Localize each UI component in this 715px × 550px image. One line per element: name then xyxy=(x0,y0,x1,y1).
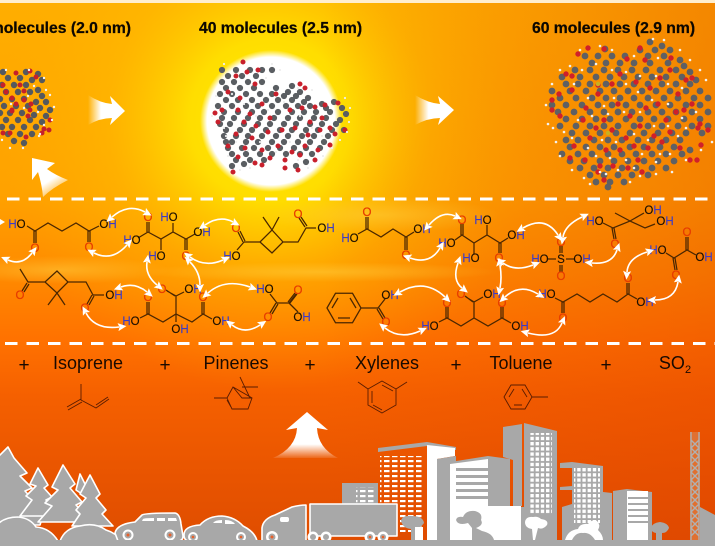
arrow: up, emissions rising xyxy=(273,412,338,458)
molecules: citric acid left: OH xyxy=(184,284,202,296)
molecules: oxalic acid right xyxy=(649,227,713,282)
arrow: right, cluster 40 to 60 xyxy=(415,95,454,125)
molecules: citric acid left: O xyxy=(199,292,208,304)
low striped building xyxy=(613,489,652,541)
precursor labels row xyxy=(18,353,691,376)
molecules: succinic acid: O xyxy=(402,250,411,262)
molecules: oxalic acid right: O xyxy=(683,227,692,239)
molecules: pinic acid: O xyxy=(232,223,241,235)
molecular cluster: 40 molecules xyxy=(212,62,350,172)
car: beetle xyxy=(184,516,257,542)
heading: 40 molecules: 40 molecules (2.5 nm) xyxy=(199,20,362,37)
tall tower xyxy=(503,423,557,541)
molecules: glutaric acid: O xyxy=(85,242,94,254)
molecules: adipic acid: O xyxy=(624,273,633,285)
molecules: citric-like acid right: O xyxy=(457,289,466,301)
molecules: citric acid left: HO xyxy=(122,316,140,328)
molecules: pinonic acid: O xyxy=(16,290,25,302)
precursor labels row: 2 xyxy=(685,364,691,376)
molecules: sulfuric acid: HO xyxy=(531,254,549,266)
structure: pinene xyxy=(214,377,258,409)
precursor labels row: + xyxy=(600,355,612,376)
molecules: glutaric acid xyxy=(8,219,117,255)
mid tower xyxy=(560,462,612,541)
molecules: pinic acid xyxy=(223,209,335,263)
molecules: sulfuric acid: O xyxy=(557,271,566,283)
precursor labels row: Isoprene xyxy=(53,353,123,373)
molecules: tartaric acid left: HO xyxy=(160,212,178,224)
molecules: methyl hydroxy acid: HO xyxy=(586,216,604,228)
molecules: oxalic acid left: O xyxy=(264,312,273,324)
molecules: oxalic acid left: O xyxy=(294,285,303,297)
molecular cluster: 60 molecules xyxy=(546,39,712,187)
molecular cluster: 20 molecules xyxy=(0,70,54,148)
molecules: tartaric acid left: OH xyxy=(193,227,211,239)
dashed divider xyxy=(5,342,715,345)
molecules: citric-like acid right: HO xyxy=(421,321,439,333)
molecules: oxalic acid left: OH xyxy=(293,312,311,324)
molecules: citric acid left: OH xyxy=(171,324,189,336)
cityscape xyxy=(0,423,715,546)
structure: toluene xyxy=(504,385,548,409)
molecules: methyl hydroxy acid: OH xyxy=(656,216,674,228)
molecules: benzoic acid: OH xyxy=(381,290,399,302)
molecules: tartaric acid left: O xyxy=(144,212,153,224)
molecules: benzoic acid: O xyxy=(382,317,391,329)
molecules: methyl hydroxy acid xyxy=(586,205,674,251)
heading: 60 molecules: 60 molecules (2.9 nm) xyxy=(532,20,695,37)
structure: isoprene xyxy=(67,384,109,410)
molecules: oxalic acid right: OH xyxy=(695,252,713,264)
molecules: pinonic acid xyxy=(16,269,123,315)
trees: city xyxy=(401,511,669,540)
molecules: pinic acid: OH xyxy=(317,223,335,235)
molecules: citric-like acid right: O xyxy=(443,298,452,310)
molecules: glutaric acid: O xyxy=(31,243,40,255)
structure: xylene xyxy=(358,381,407,413)
molecules: glutaric acid: HO xyxy=(8,219,26,231)
molecules: pinonic acid: OH xyxy=(105,290,123,302)
precursor labels row: Pinenes xyxy=(203,353,269,373)
precursor labels row: Xylenes xyxy=(355,353,419,373)
molecules: tartaric acid left: HO xyxy=(148,251,166,263)
molecules: tartaric acid right xyxy=(438,215,525,265)
molecules: citric-like acid right: OH xyxy=(483,289,501,301)
dashed divider xyxy=(7,198,715,200)
precursor labels row: + xyxy=(18,355,30,376)
bottom margin xyxy=(0,546,715,550)
molecules: tartaric acid left xyxy=(123,212,211,263)
molecules: citric acid left: OH xyxy=(212,316,230,328)
molecules: pinonic acid: O xyxy=(81,303,90,315)
molecules: pinic acid: O xyxy=(294,209,303,221)
molecules: benzoic acid xyxy=(327,290,399,329)
molecules: tartaric acid right: HO xyxy=(438,238,456,250)
molecules: citric acid left: O xyxy=(144,292,153,304)
molecules: pinic acid: HO xyxy=(223,251,241,263)
hydrogen-bond arrows xyxy=(0,208,678,335)
molecules: succinic acid: HO xyxy=(341,233,359,245)
molecules: methyl hydroxy acid: OH xyxy=(644,205,662,217)
molecules: sulfuric acid: O xyxy=(557,237,566,249)
molecules: tartaric acid right: O xyxy=(458,215,467,227)
molecules: sulfuric acid xyxy=(531,237,591,283)
molecules: adipic acid: OH xyxy=(636,297,654,309)
sun xyxy=(200,50,342,192)
trees: forest xyxy=(0,447,122,541)
building with orange facade xyxy=(378,442,456,540)
molecules: tartaric acid right: OH xyxy=(507,230,525,242)
molecules: oxalic acid right: HO xyxy=(649,245,667,257)
molecules: tartaric acid right: HO xyxy=(474,215,492,227)
molecules: citric-like acid right: O xyxy=(498,298,507,310)
precursor labels row: Toluene xyxy=(489,353,553,373)
molecules: citric acid left xyxy=(122,284,230,336)
molecules: tartaric acid right: HO xyxy=(462,253,480,265)
precursor labels row: + xyxy=(450,355,462,376)
molecules: oxalic acid right: O xyxy=(672,270,681,282)
molecules: succinic acid xyxy=(341,207,431,262)
car: station wagon xyxy=(115,513,183,541)
arrow: right, cluster 20 to 40 xyxy=(88,95,125,125)
molecules: oxalic acid left: HO xyxy=(256,284,274,296)
molecules: oxalic acid left xyxy=(256,284,311,324)
molecules: citric-like acid right xyxy=(421,289,529,333)
molecules: citric-like acid right: OH xyxy=(511,321,529,333)
precursor labels row: + xyxy=(304,355,316,376)
molecules: adipic acid xyxy=(538,273,654,325)
far-left low building xyxy=(342,483,378,507)
molecules: adipic acid: HO xyxy=(538,289,556,301)
truck xyxy=(262,504,397,543)
molecules: tartaric acid right: O xyxy=(495,253,504,265)
molecules: citric acid left: O xyxy=(158,284,167,296)
molecules: sulfuric acid: S xyxy=(557,254,565,266)
molecules: adipic acid: O xyxy=(559,313,568,325)
precursor labels row: SO xyxy=(659,353,685,373)
molecules: methyl hydroxy acid: O xyxy=(611,239,620,251)
molecules: sulfuric acid: OH xyxy=(573,254,591,266)
building with striped white face xyxy=(450,456,521,541)
molecules: tartaric acid left: HO xyxy=(123,235,141,247)
lattice tower xyxy=(690,432,715,541)
arrow: up-left, into first cluster xyxy=(32,158,68,197)
ground strip xyxy=(0,540,715,546)
molecules: tartaric acid left: O xyxy=(182,251,191,263)
molecules: succinic acid: O xyxy=(363,207,372,219)
molecules: glutaric acid: OH xyxy=(99,219,117,231)
molecules: succinic acid: OH xyxy=(413,224,431,236)
precursor labels row: + xyxy=(159,355,171,376)
